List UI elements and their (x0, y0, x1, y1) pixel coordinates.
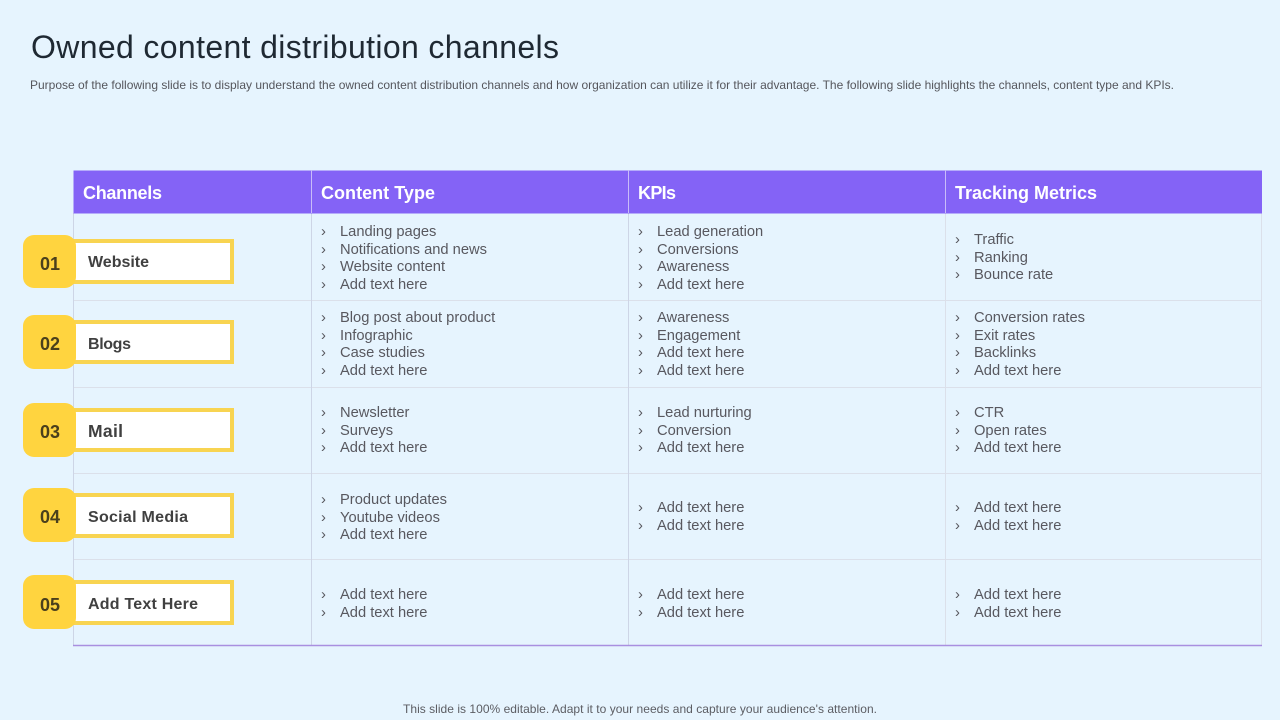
row 2 content: Infographic (340, 328, 413, 344)
channel tag 04: Social Media: 04 (40, 507, 60, 527)
row 2 content: Awareness (657, 310, 729, 326)
row 1 content (321, 224, 1053, 293)
row 2 content: › (321, 328, 326, 344)
channel tag 05: Add Text Here: Add Text Here (88, 596, 198, 613)
row 2 content: Backlinks (974, 345, 1036, 361)
header row: KPIs (638, 183, 676, 203)
row 2 content: Add text here (974, 363, 1061, 379)
channel tag 01: Website: 01 (40, 254, 60, 274)
row 5 content: › (638, 605, 643, 621)
row 3 content: Add text here (974, 440, 1061, 456)
row 5 content: Add text here (340, 587, 427, 603)
row 2 content: › (955, 328, 960, 344)
row 4 content: Add text here (340, 527, 427, 543)
row 1 content: Awareness (657, 259, 729, 275)
row 4 content: › (321, 492, 326, 508)
row 2 content: › (321, 363, 326, 379)
row 2 content: › (955, 363, 960, 379)
row 3 content: › (638, 440, 643, 456)
row 1 content: › (321, 242, 326, 258)
row 2 content: › (321, 310, 326, 326)
row 1 content: › (955, 232, 960, 248)
row 3 content: › (955, 405, 960, 421)
row 2 content: Add text here (657, 345, 744, 361)
row 2 content: Case studies (340, 345, 425, 361)
header row (74, 170, 1262, 214)
row 1 content: › (321, 277, 326, 293)
row 1 content: Ranking (974, 250, 1028, 266)
row 3 content: Lead nurturing (657, 405, 752, 421)
row 1 content: Website content (340, 259, 445, 275)
row 3 content: Open rates (974, 423, 1047, 439)
channel tag 04: Social Media: Social Media (88, 509, 188, 526)
header row: Channels (83, 183, 162, 203)
row 4 content: › (638, 500, 643, 516)
row 2 content: › (638, 345, 643, 361)
row 1 content: › (638, 224, 643, 240)
row 4 content: › (321, 527, 326, 543)
row 2 content: › (955, 345, 960, 361)
row 3 content (321, 405, 1061, 456)
row 1 content: Landing pages (340, 224, 436, 240)
row 3 content: Newsletter (340, 405, 409, 421)
row 2 content (321, 310, 1085, 379)
row 2 content: Add text here (340, 363, 427, 379)
header row: Tracking Metrics (955, 183, 1097, 203)
row 2 content: › (638, 363, 643, 379)
row 1 content: Add text here (340, 277, 427, 293)
row 4 content: Add text here (974, 500, 1061, 516)
row 2 content: › (321, 345, 326, 361)
row 2 content: Blog post about product (340, 310, 495, 326)
row 3 content: › (638, 423, 643, 439)
row 4 content: Add text here (657, 518, 744, 534)
channel tag 02: Blogs (23, 315, 232, 369)
row 2 content: Add text here (657, 363, 744, 379)
row 3 content: › (638, 405, 643, 421)
row 5 content: › (321, 587, 326, 603)
row 1 content: Conversions (657, 242, 739, 258)
row 3 content: CTR (974, 405, 1004, 421)
channel tag 03: Mail (23, 403, 232, 457)
row 4 content: Add text here (657, 500, 744, 516)
channel tag 01: Website: Website (88, 254, 149, 271)
channel tag 03: Mail: 03 (40, 422, 60, 442)
channel tag 05: Add Text Here: 05 (40, 595, 60, 615)
row 4 content: Add text here (974, 518, 1061, 534)
row 1 content: Bounce rate (974, 267, 1053, 283)
row 3 content: Surveys (340, 423, 393, 439)
row 1 content: › (321, 259, 326, 275)
row 5 content: Add text here (657, 605, 744, 621)
channel tag 02: Blogs: Blogs (88, 336, 131, 353)
title: Owned content distribution channels (31, 29, 559, 65)
row 1 content: Notifications and news (340, 242, 487, 258)
row 3 content: Add text here (657, 440, 744, 456)
header row: Content Type (321, 183, 435, 203)
row 4 content: Product updates (340, 492, 447, 508)
channel tag 05: Add Text Here (23, 575, 232, 629)
row 2 content: › (638, 328, 643, 344)
row 5 content: › (955, 605, 960, 621)
channel tag 02: Blogs: 02 (40, 334, 60, 354)
row 4 content (321, 492, 1061, 543)
row 1 content: › (638, 277, 643, 293)
row 5 content: › (638, 587, 643, 603)
row 5 content: › (321, 605, 326, 621)
row 3 content: › (321, 405, 326, 421)
row 3 content: › (321, 440, 326, 456)
table grid (73, 213, 1262, 645)
row 3 content: Add text here (340, 440, 427, 456)
row 3 content: › (321, 423, 326, 439)
table bottom rule (73, 644, 1262, 646)
channel tag 03: Mail: Mail (88, 421, 123, 441)
row 3 content: › (955, 423, 960, 439)
row 1 content: Traffic (974, 232, 1014, 248)
row 5 content: Add text here (974, 587, 1061, 603)
row 2 content: Conversion rates (974, 310, 1085, 326)
row 5 content: Add text here (974, 605, 1061, 621)
channel tag 04: Social Media (23, 488, 232, 542)
row 2 content: › (955, 310, 960, 326)
table (73, 170, 1262, 646)
footer note: This slide is 100% editable. Adapt it to your needs and capture your audience's attention. (403, 702, 877, 716)
row 4 content: › (955, 500, 960, 516)
row 1 content: Add text here (657, 277, 744, 293)
row 5 content: › (955, 587, 960, 603)
row 4 content: › (638, 518, 643, 534)
row 2 content: Exit rates (974, 328, 1035, 344)
row 4 content: › (321, 510, 326, 526)
row 5 content: Add text here (657, 587, 744, 603)
row 3 content: › (955, 440, 960, 456)
row 4 content: › (955, 518, 960, 534)
subtitle text: Purpose of the following slide is to display understand the owned content distribution channels and how organization can utilize it for their advantage. The following slide highlights the channels, content type and KPIs. (30, 78, 1174, 92)
row 1 content: Lead generation (657, 224, 763, 240)
row 2 content: › (638, 310, 643, 326)
row 1 content: › (638, 242, 643, 258)
row 1 content: › (955, 250, 960, 266)
row 5 content (321, 587, 1061, 621)
row 1 content: › (638, 259, 643, 275)
row 3 content: Conversion (657, 423, 731, 439)
channel tag 01: Website (23, 235, 232, 288)
row 1 content: › (321, 224, 326, 240)
row 4 content: Youtube videos (340, 510, 440, 526)
row 5 content: Add text here (340, 605, 427, 621)
row 2 content: Engagement (657, 328, 740, 344)
row 1 content: › (955, 267, 960, 283)
